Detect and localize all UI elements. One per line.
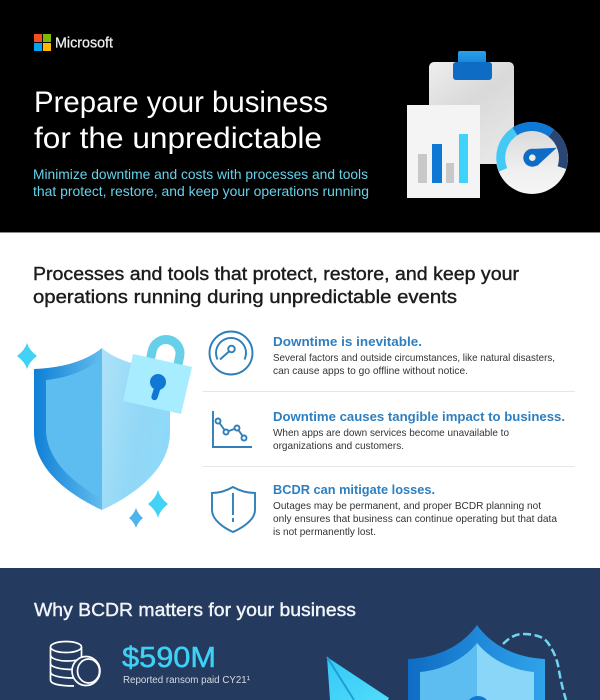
section heading: operations running during unpredictable events xyxy=(33,286,457,307)
heading: Downtime causes tangible impact to business. xyxy=(273,409,565,424)
section heading xyxy=(33,263,519,307)
icon: clipboard with chart and gauge xyxy=(407,51,568,198)
stat: ransom paid: $590M xyxy=(122,642,216,674)
body text xyxy=(273,352,555,377)
padlock xyxy=(123,337,192,414)
heading: BCDR can mitigate losses. xyxy=(273,482,435,497)
subtitle xyxy=(33,166,369,199)
icon: declining line chart xyxy=(213,411,252,447)
section heading: Processes and tools that protect, restore, and keep your xyxy=(33,263,519,284)
subtitle: that protect, restore, and keep your operations running xyxy=(33,183,369,199)
illustration: large shield xyxy=(408,625,545,700)
heading: Why BCDR matters for your business xyxy=(34,599,356,620)
panel: tangible impact xyxy=(213,409,565,452)
title: Prepare your business xyxy=(34,86,328,119)
body text xyxy=(273,500,557,538)
icon: shield alert xyxy=(212,487,255,532)
heading: Downtime is inevitable. xyxy=(273,334,422,349)
illustration: paper plane xyxy=(327,657,389,700)
sparkles xyxy=(17,343,168,528)
icon: Microsoft logo xyxy=(34,34,51,51)
stat label: Reported ransom paid CY21¹ xyxy=(123,675,251,686)
body text xyxy=(273,427,509,452)
body text: Several factors and outside circumstances, like natural disasters, xyxy=(273,352,555,364)
shield xyxy=(34,348,170,510)
body text: Outages may be permanent, and proper BCDR planning not xyxy=(273,500,541,512)
body text: can cause apps to go offline without notice. xyxy=(273,365,468,377)
panel: header xyxy=(0,0,600,232)
illustration: shield with padlock xyxy=(17,337,192,528)
subtitle: Minimize downtime and costs with processes and tools xyxy=(33,166,368,182)
panel: BCDR mitigates losses xyxy=(212,482,557,538)
icon: coins xyxy=(50,642,100,686)
title: for the unpredictable xyxy=(34,122,322,155)
divider xyxy=(0,232,600,233)
brand name: Microsoft xyxy=(55,36,113,52)
icon: gauge xyxy=(210,332,252,374)
title xyxy=(34,86,328,155)
panel: downtime is inevitable xyxy=(210,332,555,377)
panel: why BCDR matters xyxy=(0,568,600,700)
dashed orbit arrow xyxy=(503,634,566,700)
body text: organizations and customers. xyxy=(273,440,404,452)
body text: When apps are down services become unavailable to xyxy=(273,427,509,439)
body text: only ensures that business can continue operating but that data xyxy=(273,513,557,525)
body text: is not permanently lost. xyxy=(273,526,376,538)
